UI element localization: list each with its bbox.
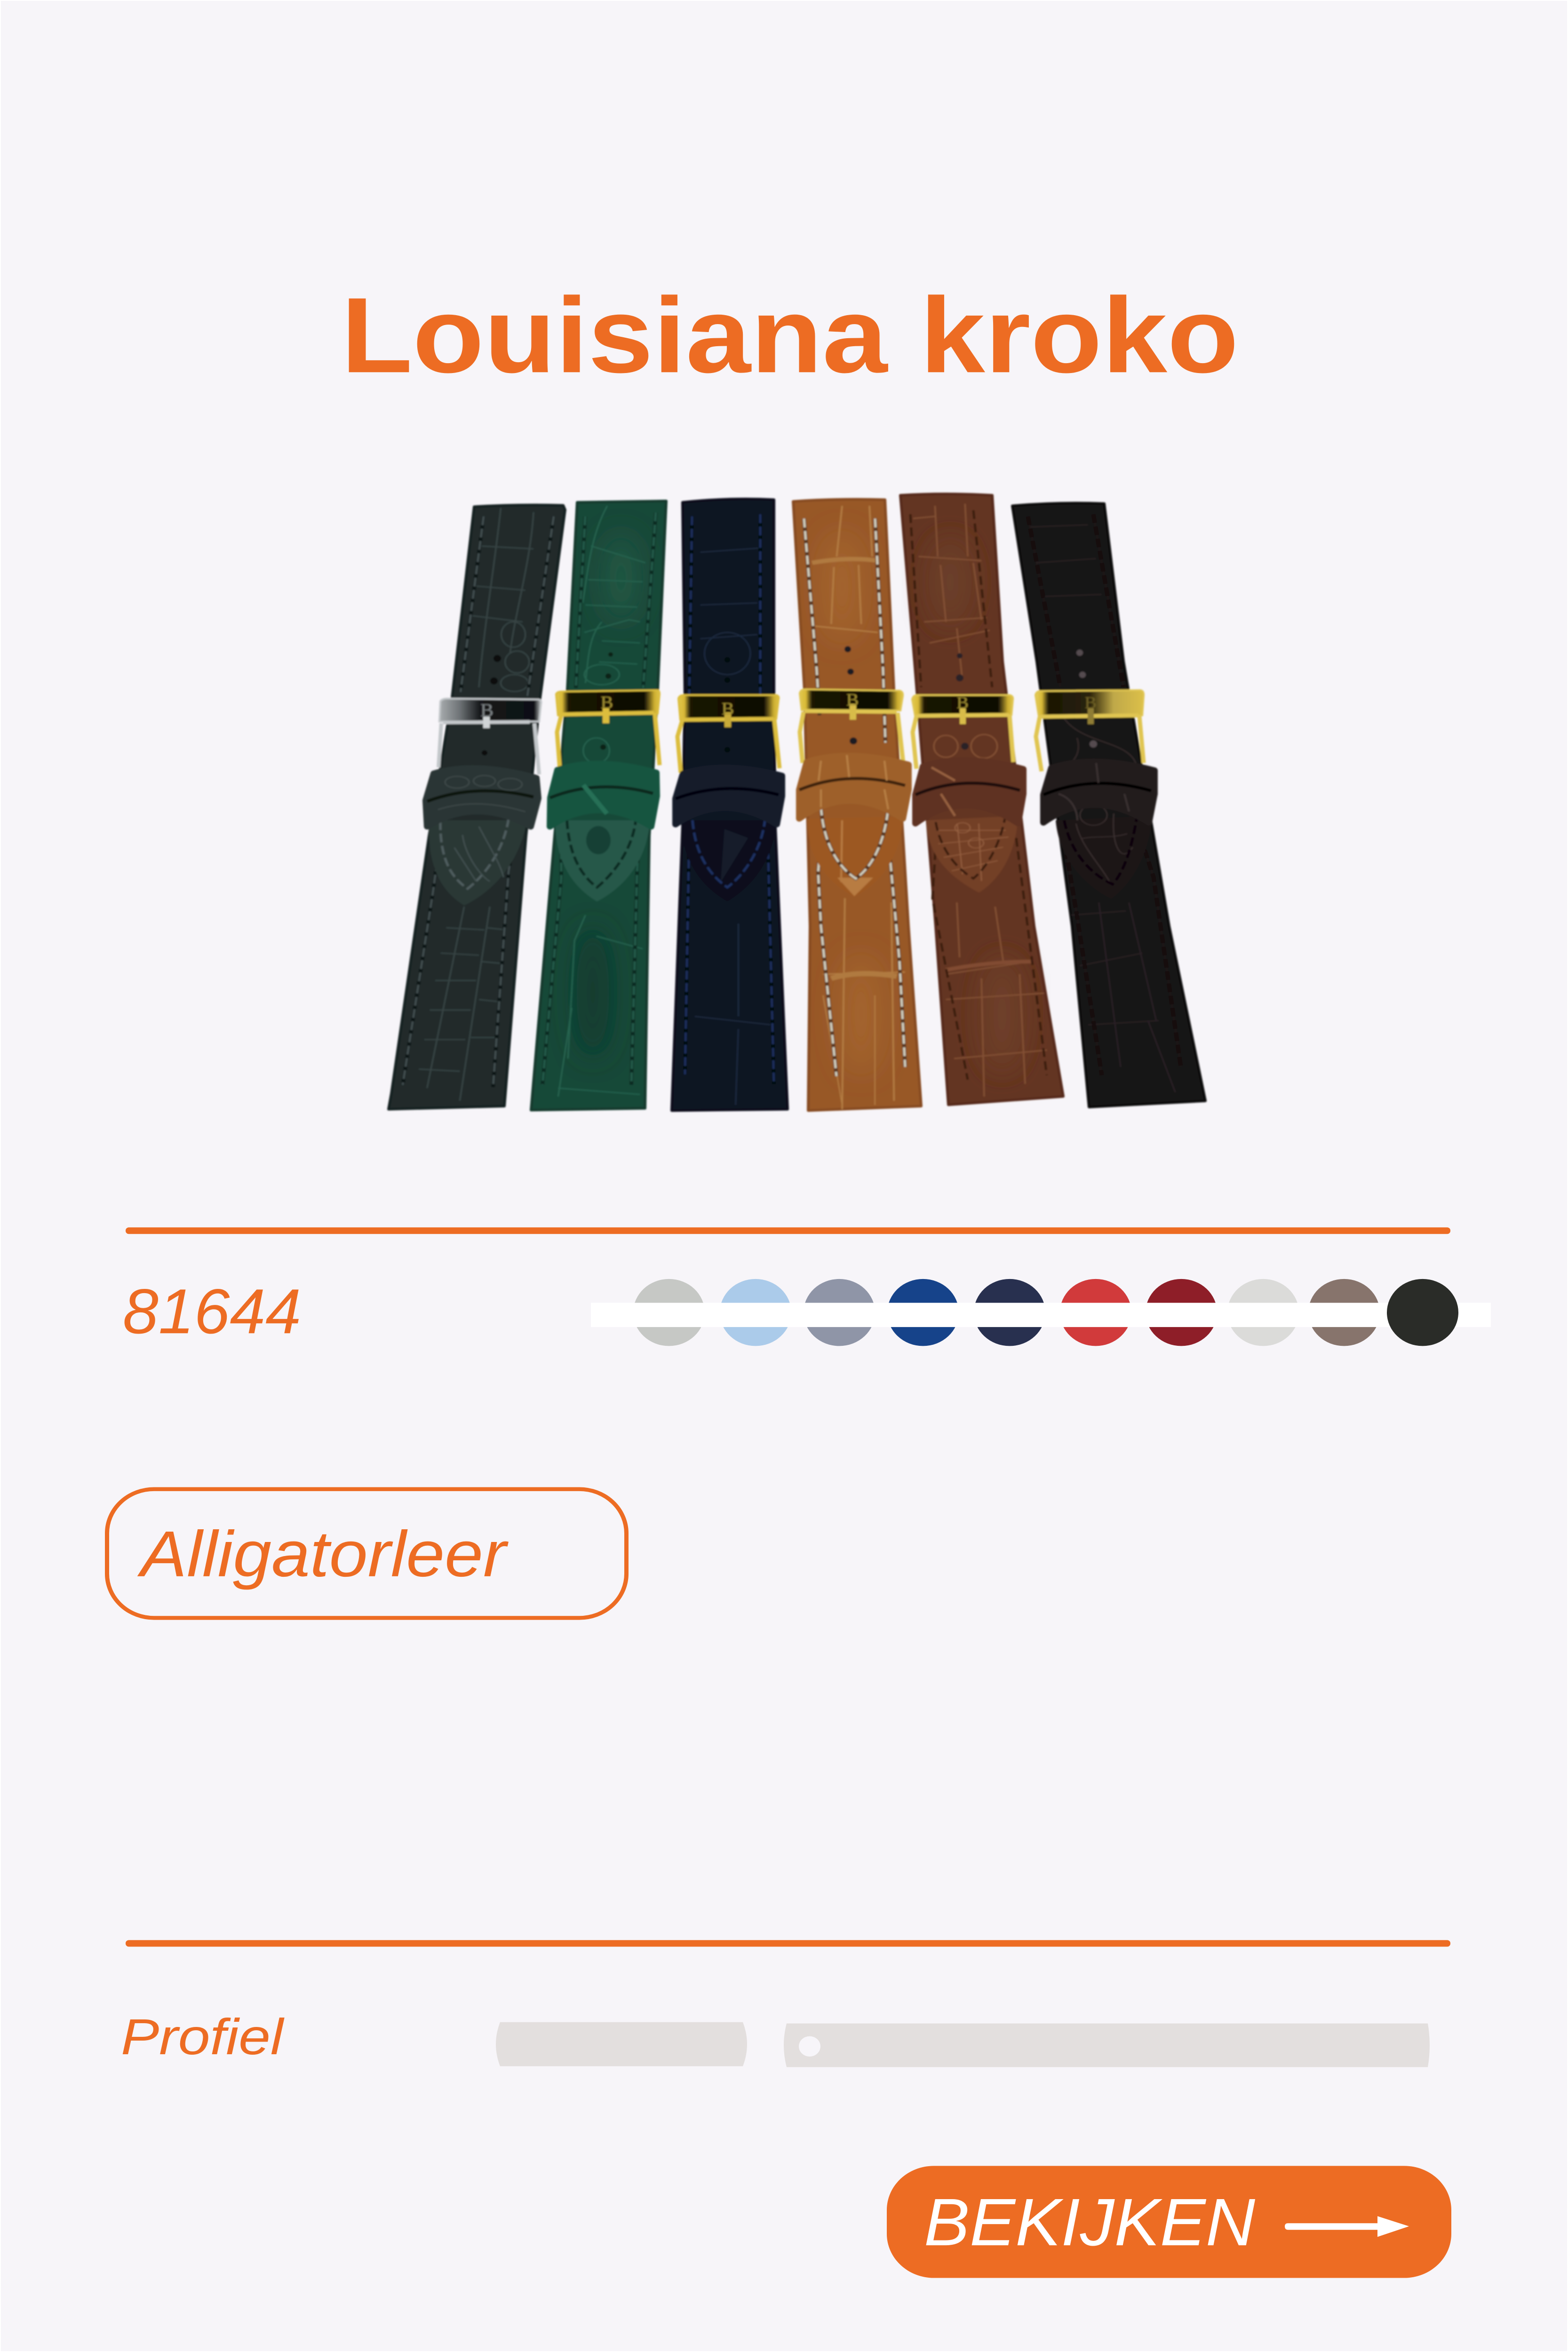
strap 2: green with gold buckle: B (601, 693, 613, 712)
strap 4: tan cognac with white stitching and gold buckle: B (846, 690, 859, 710)
bottom divider line (126, 1940, 1450, 1947)
view button: BEKIJKEN (924, 2185, 1256, 2260)
strap 3: navy with gold buckle: B (722, 699, 734, 719)
view button (887, 2166, 1451, 2278)
top divider line (126, 1227, 1450, 1234)
icon: arrow (1285, 2216, 1409, 2237)
strap 3: navy with gold buckle (672, 499, 788, 1111)
colour swatches (591, 1279, 1491, 1346)
article number: 81644 (123, 1276, 301, 1347)
material tag: Alligatorleer (137, 1518, 509, 1590)
product image: six alligator leather watch straps (389, 494, 1205, 1111)
strap 5: brown with gold buckle (900, 494, 1063, 1105)
strap 6: near-black with gold buckle (1012, 503, 1205, 1107)
profile label: Profiel (121, 2008, 285, 2065)
strap 5: brown with gold buckle: B (956, 693, 969, 712)
strap 1: dark grey with silver buckle: B (480, 700, 493, 720)
material tag (107, 1489, 627, 1618)
strap 1: dark grey with silver buckle (389, 505, 565, 1109)
title: Louisiana kroko (341, 275, 1239, 395)
strap 6: near-black with gold buckle: B (1084, 693, 1097, 712)
profile icon: strap side view (784, 2024, 1430, 2067)
profile icon: strap cross section (496, 2022, 747, 2066)
strap 2: green with gold buckle (531, 501, 666, 1110)
strap 4: tan cognac with white stitching and gold buckle (793, 499, 921, 1111)
